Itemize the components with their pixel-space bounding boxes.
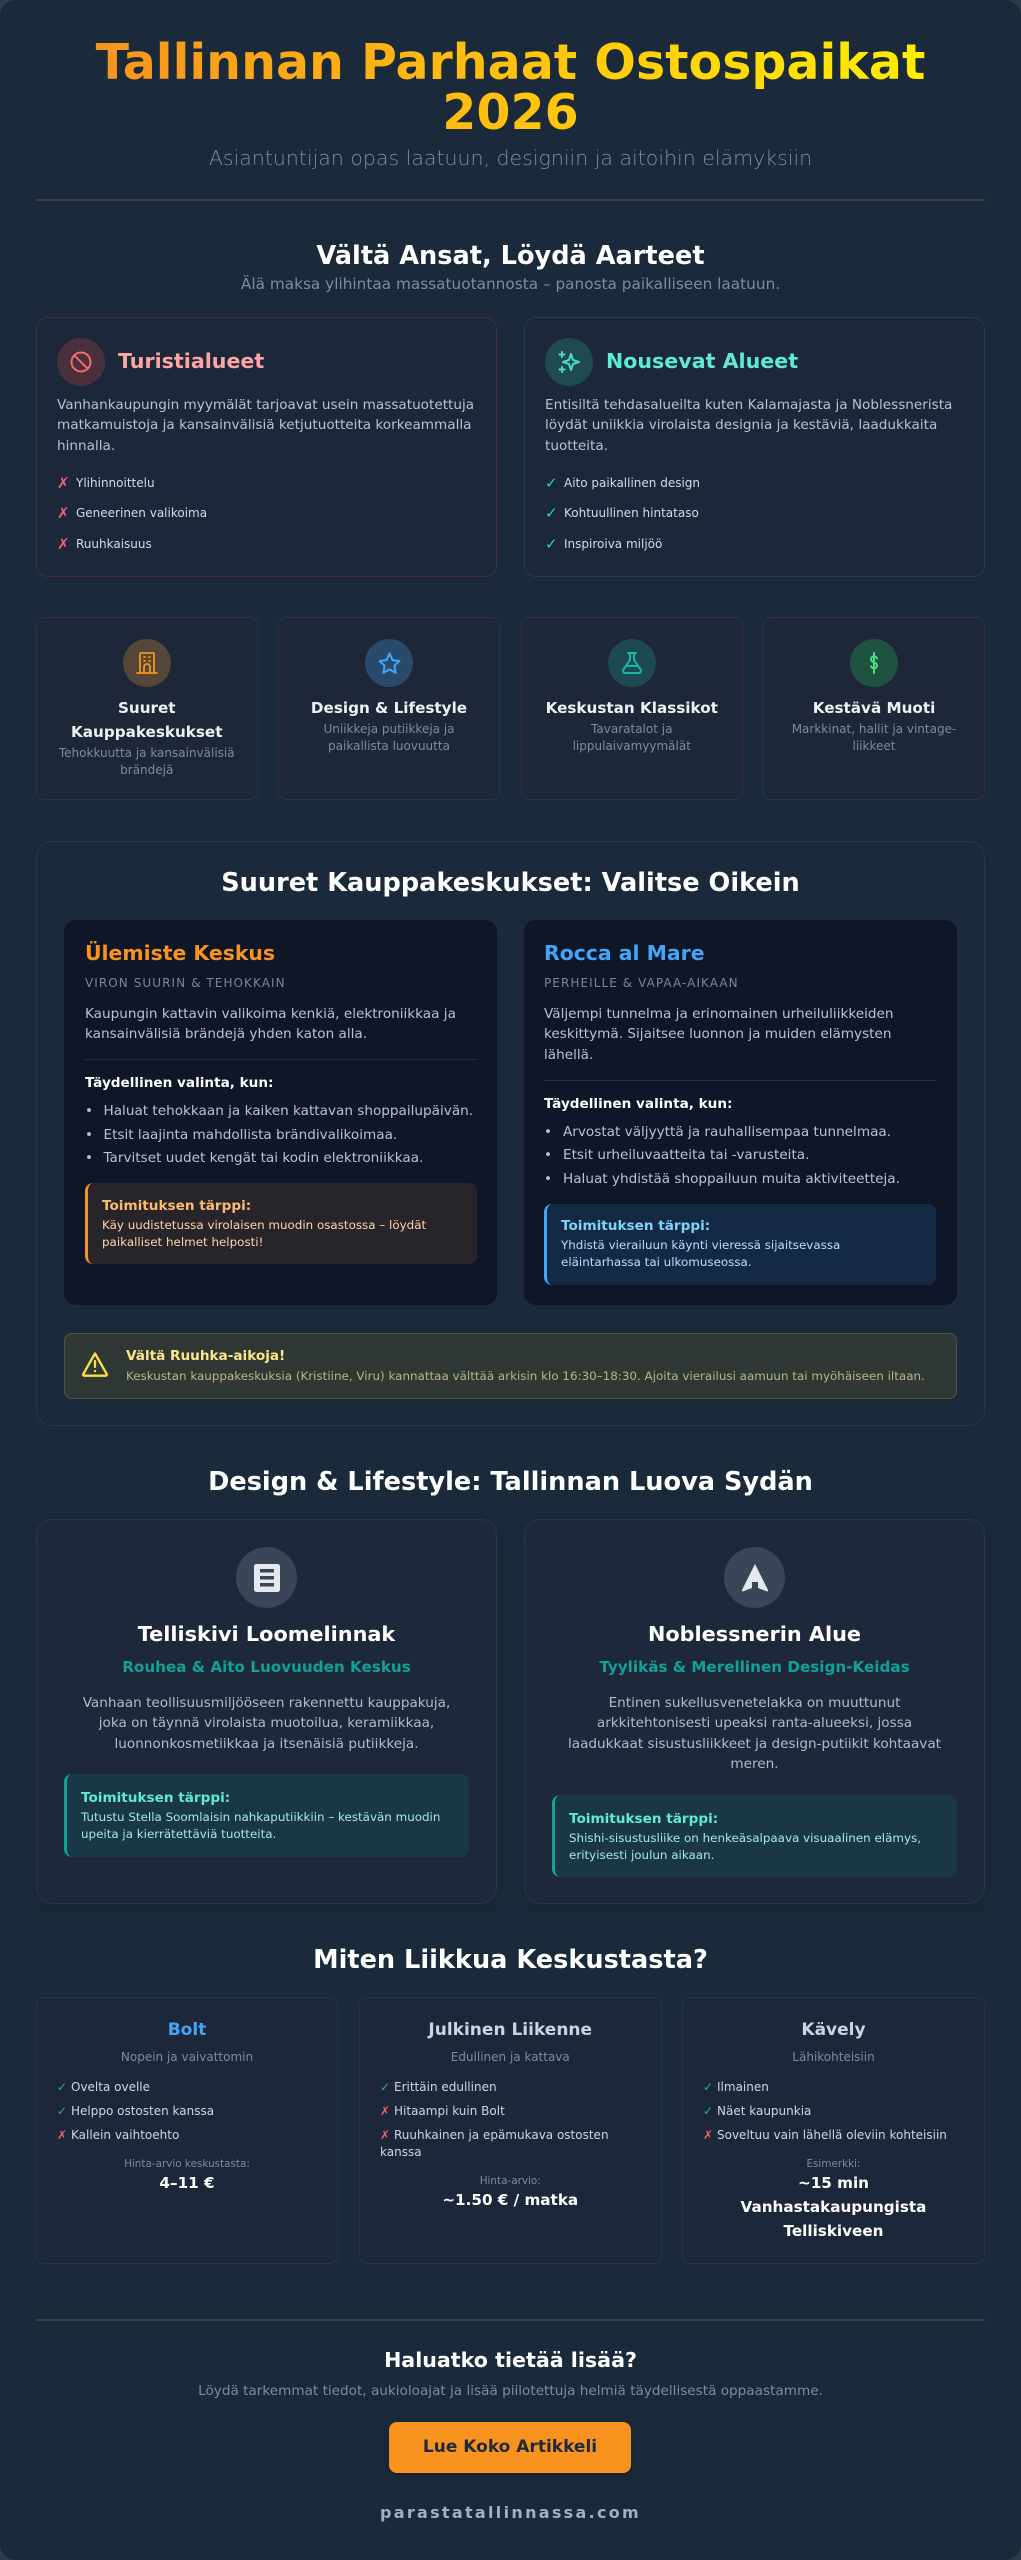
panel: Telliskivi — [36, 1519, 497, 1904]
tagline: Rocca al Mare: PERHEILLE & VAPAA-AIKAAN — [544, 976, 739, 990]
list: walking pros and cons: Näet kaupunkia — [717, 2104, 811, 2118]
example: walking: Vanhastakaupungista — [741, 2198, 926, 2216]
panel: shopping centres comparison — [36, 841, 985, 1426]
list: walking pros and cons: ✗ — [703, 2128, 713, 2142]
description: city classics — [573, 722, 691, 752]
description: shopping centres: Tehokkuutta ja kansainvälisiä — [59, 746, 235, 760]
callout: avoid rush hours — [64, 1333, 957, 1399]
card: Bolt — [36, 1997, 338, 2264]
callout: Telliskivi tip — [64, 1774, 469, 1857]
title: Tallinnan Parhaat Ostospaikat — [96, 34, 925, 91]
callout: Rocca tip — [544, 1204, 936, 1284]
text: emerging areas: tuotteita. — [545, 438, 608, 454]
text: Ülemiste: Kaupungin kattavin valikoima kenkiä, elektroniikkaa ja — [85, 1006, 456, 1022]
text: tourist areas: matkamuistoja ja kansainvälisiä ketjutuotteita korkeammalla — [57, 417, 472, 433]
example: walking: Telliskiveen — [784, 2222, 883, 2240]
list: walking pros and cons — [703, 2080, 947, 2142]
price label: public transport: Hinta-arvio: — [480, 2175, 541, 2187]
list: public transport pros and cons: ✗ — [380, 2104, 390, 2118]
text: Ülemiste — [85, 1006, 456, 1042]
callout: Noblessner tip: Toimituksen tärppi: — [569, 1811, 718, 1827]
panel: emerging areas — [524, 317, 985, 577]
title — [0, 38, 1021, 138]
text: Rocca al Mare: Väljempi tunnelma ja erinomainen urheiluliikkeiden — [544, 1006, 893, 1022]
list: tourist drawbacks: Geneerinen valikoima — [76, 506, 207, 520]
icon: dollar — [850, 639, 898, 687]
list: public transport pros and cons: ✗ — [380, 2128, 390, 2142]
card: city classics — [521, 617, 742, 800]
list: tourist drawbacks: ✗ — [57, 504, 70, 522]
callout: Telliskivi tip: Tutustu Stella Soomlaisin nahkaputiikkiin – kestävän muodin — [81, 1810, 440, 1824]
description: design and lifestyle: paikallista luovuutta — [328, 738, 450, 752]
callout text: Keskustan kauppakeskuksia (Kristiine, Viru) kannattaa välttää arkisin klo 16:30–18:30. Ajoita vierailusi aamuun tai myöhäiseen iltaan. — [126, 1369, 925, 1383]
icon: flask — [608, 639, 656, 687]
description: city classics: lippulaivamyymälät — [573, 738, 691, 752]
heading: Turistialueet: Turistialueet — [118, 349, 264, 373]
heading: want to know more: Haluatko tietää lisää? — [384, 2348, 637, 2372]
subtitle: Asiantuntijan opas laatuun, designiin ja aitoihin elämyksiin — [209, 146, 812, 170]
callout: Telliskivi tip: Toimituksen tärppi: — [81, 1790, 230, 1806]
list: Ülemiste reasons: • — [85, 1126, 93, 1142]
list: walking pros and cons: Ilmainen — [717, 2080, 769, 2094]
list: walking pros and cons: ✓ — [703, 2080, 713, 2094]
list: Rocca reasons: Etsit urheiluvaatteita tai -varusteita. — [563, 1147, 809, 1163]
heading: getting around: Miten Liikkua Keskustasta? — [313, 1945, 708, 1975]
description: shopping centres: brändejä — [120, 762, 173, 776]
icon: sparkles — [545, 338, 593, 386]
card: sustainable fashion — [763, 617, 985, 800]
text: Noblessner: laadukkaat sisustusliikkeet ja design-putiikit kohtaavat — [568, 1736, 941, 1752]
list: public transport pros and cons: ✓ — [380, 2080, 390, 2094]
list: tourist drawbacks: Ylihinnoittelu — [76, 476, 155, 490]
website: parastatallinnassa.com — [380, 2503, 641, 2522]
icon: document — [236, 1547, 297, 1608]
name: Bolt: Bolt — [168, 2020, 206, 2040]
list: public transport pros and cons: Erittäin edullinen — [394, 2080, 497, 2094]
card: public transport — [359, 1997, 662, 2264]
list: Rocca reasons — [544, 1124, 900, 1186]
text: Telliskivi: joka on täynnä virolaista muotoilua, keramiikkaa, — [99, 1715, 434, 1731]
description: shopping centres — [58, 746, 235, 776]
text: tourist areas: Vanhankaupungin myymälät tarjoavat usein massatuotettuja — [57, 397, 474, 413]
list: tourist drawbacks: ✗ — [57, 535, 70, 553]
button: read full article — [389, 2422, 631, 2473]
callout: Noblessner tip: Shishi-sisustusliike on henkeäsalpaava visuaalinen elämys, — [569, 1831, 921, 1845]
icon: navigation arrow — [724, 1547, 785, 1608]
list: emerging benefits: ✓ — [545, 504, 558, 522]
text: Telliskivi: Vanhaan teollisuusmiljööseen rakennettu kauppakuja, — [83, 1695, 450, 1711]
description: sustainable fashion: Markkinat, hallit ja vintage- — [792, 722, 956, 736]
list: walking pros and cons: ✓ — [703, 2104, 713, 2118]
list: Bolt pros and cons: ✓ — [57, 2080, 67, 2094]
list: Rocca reasons: • — [544, 1170, 552, 1186]
list: Ülemiste reasons: • — [85, 1103, 93, 1119]
description: design and lifestyle: Uniikkeja putiikkeja ja — [323, 722, 455, 736]
text: tourist areas: hinnalla. — [57, 438, 115, 454]
list: Ülemiste reasons: • — [85, 1150, 93, 1166]
list: Bolt pros and cons: Kallein vaihtoehto — [71, 2128, 179, 2142]
text: Noblessner: arkkitehtonisesti upeaksi ranta-alueeksi, jossa — [597, 1715, 912, 1731]
list: public transport pros and cons: Ruuhkainen ja epämukava ostosten — [394, 2128, 609, 2142]
text: emerging areas: löydät uniikkia virolaista designia ja kestäviä, laadukkaita — [545, 417, 937, 433]
callout: Ülemiste tip — [85, 1183, 477, 1264]
callout: Ülemiste tip: paikalliset helmet helposti! — [102, 1234, 263, 1248]
price: public transport: ~1.50 € / matka — [442, 2191, 578, 2209]
text: Noblessner — [568, 1695, 941, 1772]
list: emerging benefits: Aito paikallinen design — [564, 476, 700, 490]
callout: Noblessner tip: erityisesti joulun aikaan. — [569, 1848, 714, 1862]
tagline: Telliskivi: Rouhea & Aito Luovuuden Keskus — [122, 1658, 411, 1676]
icon: star — [365, 639, 413, 687]
text: Noblessner: Entinen sukellusvenetelakka on muuttunut — [609, 1695, 900, 1711]
list: tourist drawbacks: Ruuhkaisuus — [76, 537, 152, 551]
card: Ülemiste — [64, 920, 497, 1305]
icon: building — [123, 639, 171, 687]
title: 2026 — [442, 84, 579, 141]
description: sustainable fashion: liikkeet — [853, 738, 895, 752]
list: Ülemiste reasons: Haluat tehokkaan ja kaiken kattavan shoppailupäivän. — [104, 1103, 473, 1119]
tagline: walking: Lähikohteisiin — [792, 2050, 875, 2064]
label: perfect choice: Täydellinen valinta, kun: — [544, 1096, 732, 1112]
callout title: Vältä Ruuhka-aikoja! — [126, 1348, 285, 1364]
callout: Rocca tip: Toimituksen tärppi: — [561, 1218, 710, 1234]
list: Rocca reasons: • — [544, 1147, 552, 1163]
example: walking — [740, 2174, 926, 2240]
list: tourist drawbacks — [57, 474, 207, 553]
list: Bolt pros and cons: Ovelta ovelle — [71, 2080, 150, 2094]
name: Noblessner: Noblessnerin Alue — [648, 1622, 861, 1646]
list: Rocca reasons: • — [544, 1124, 552, 1140]
list: Ülemiste reasons: Tarvitset uudet kengät tai kodin elektroniikkaa. — [104, 1150, 423, 1166]
example: walking: ~15 min — [798, 2174, 869, 2192]
label: shopping centres — [71, 699, 222, 741]
name: Telliskivi: Telliskivi Loomelinnak — [138, 1622, 395, 1646]
callout: Noblessner tip — [552, 1795, 957, 1877]
list: tourist drawbacks: ✗ — [57, 474, 70, 492]
text: Ülemiste: kansainvälisiä brändejä yhden katon alla. — [85, 1026, 367, 1042]
list: Ülemiste reasons — [85, 1103, 473, 1166]
card: Rocca al Mare — [524, 920, 957, 1305]
icon: warning — [82, 1352, 108, 1377]
list: emerging benefits: ✓ — [545, 535, 558, 553]
list: Bolt pros and cons: ✗ — [57, 2128, 67, 2142]
example label: walking: Esimerkki: — [806, 2158, 861, 2170]
text: tourist areas — [57, 397, 474, 454]
panel: tourist areas — [36, 317, 497, 577]
list: Bolt pros and cons: ✓ — [57, 2104, 67, 2118]
heading: choose right: Suuret Kauppakeskukset: Valitse Oikein — [221, 868, 800, 898]
name: walking: Kävely — [801, 2020, 866, 2040]
label: perfect choice: Täydellinen valinta, kun: — [85, 1075, 273, 1091]
panel: Noblessner — [524, 1519, 985, 1904]
label: shopping centres: Suuret — [118, 699, 176, 717]
list: Rocca reasons: Haluat yhdistää shoppailuun muita aktiviteetteja. — [563, 1170, 900, 1186]
list: public transport pros and cons: kanssa — [380, 2145, 422, 2159]
callout: Ülemiste tip: Toimituksen tärppi: — [102, 1198, 251, 1214]
tagline: Ülemiste: VIRON SUURIN & TEHOKKAIN — [85, 976, 286, 990]
text: Rocca al Mare — [544, 1006, 893, 1063]
list: public transport pros and cons: Hitaampi kuin Bolt — [394, 2104, 505, 2118]
text: emerging areas — [545, 397, 952, 454]
label: city classics: Keskustan Klassikot — [546, 699, 718, 717]
text: Noblessner: meren. — [730, 1756, 779, 1772]
list: Ülemiste reasons: Etsit laajinta mahdollista brändivalikoimaa. — [104, 1126, 397, 1142]
list: walking pros and cons: Soveltuu vain lähellä oleviin kohteisiin — [717, 2128, 947, 2142]
subheading: avoid traps: Älä maksa ylihintaa massatuotannosta – panosta paikalliseen laatuun. — [241, 275, 780, 293]
price: Bolt: 4–11 € — [159, 2174, 215, 2192]
name: Ülemiste: Ülemiste Keskus — [85, 941, 275, 965]
list: emerging benefits: Inspiroiva miljöö — [564, 537, 662, 551]
callout: Rocca tip: Yhdistä vierailuun käynti vieressä sijaitsevassa — [561, 1238, 840, 1252]
text: Rocca al Mare: lähellä. — [544, 1047, 593, 1063]
text: call to action: Löydä tarkemmat tiedot, aukioloajat ja lisää piilotettuja helmiä täydellisestä oppaastamme. — [198, 2383, 823, 2399]
list: emerging benefits: Kohtuullinen hintataso — [564, 506, 699, 520]
list: Bolt pros and cons: Helppo ostosten kanssa — [71, 2104, 214, 2118]
callout: Telliskivi tip: upeita ja kierrätettäviä tuotteita. — [81, 1827, 276, 1841]
price label: Bolt: Hinta-arvio keskustasta: — [124, 2158, 250, 2170]
callout: Ülemiste tip: Käy uudistetussa virolaisen muodin osastossa – löydät — [102, 1218, 426, 1232]
list: Bolt pros and cons — [57, 2080, 214, 2142]
list: Rocca reasons: Arvostat väljyyttä ja rauhallisempaa tunnelmaa. — [563, 1124, 891, 1140]
list: emerging benefits — [545, 474, 700, 553]
list: public transport pros and cons — [380, 2080, 609, 2159]
card: walking — [682, 1997, 985, 2264]
label: shopping centres: Kauppakeskukset — [71, 723, 222, 741]
description: design and lifestyle — [323, 722, 455, 752]
label: sustainable fashion: Kestävä Muoti — [813, 699, 935, 717]
tagline: Bolt: Nopein ja vaivattomin — [121, 2050, 253, 2064]
text: Rocca al Mare: keskittymä. Sijaitsee luonnon ja muiden elämysten — [544, 1026, 891, 1042]
card: design and lifestyle — [278, 617, 500, 800]
tagline: Noblessner: Tyylikäs & Merellinen Design-Keidas — [599, 1658, 910, 1676]
heading: Nousevat Alueet: Nousevat Alueet — [606, 349, 798, 373]
text: Telliskivi: luonnonkosmetiikkaa ja itsenäisiä putiikkeja. — [114, 1736, 419, 1752]
card: shopping centres — [36, 617, 258, 800]
label: design and lifestyle: Design & Lifestyle — [311, 699, 467, 717]
tagline: public transport: Edullinen ja kattava — [451, 2050, 570, 2064]
name: public transport: Julkinen Liikenne — [428, 2020, 592, 2040]
callout: Rocca tip: eläintarhassa tai ulkomuseossa. — [561, 1255, 752, 1269]
button: read full article: Lue Koko Artikkeli — [423, 2437, 597, 2457]
text: Telliskivi — [82, 1695, 450, 1752]
name: Rocca al Mare: Rocca al Mare — [544, 941, 705, 965]
description: city classics: Tavaratalot ja — [591, 722, 672, 736]
heading: avoid traps: Vältä Ansat, Löydä Aarteet — [316, 241, 705, 271]
text: emerging areas: Entisiltä tehdasalueilta kuten Kalamajasta ja Noblessnerista — [545, 397, 952, 413]
icon: ban — [57, 338, 105, 386]
description: sustainable fashion — [792, 722, 956, 752]
heading: design and lifestyle: Design & Lifestyle: Tallinnan Luova Sydän — [208, 1467, 813, 1497]
list: emerging benefits: ✓ — [545, 474, 558, 492]
